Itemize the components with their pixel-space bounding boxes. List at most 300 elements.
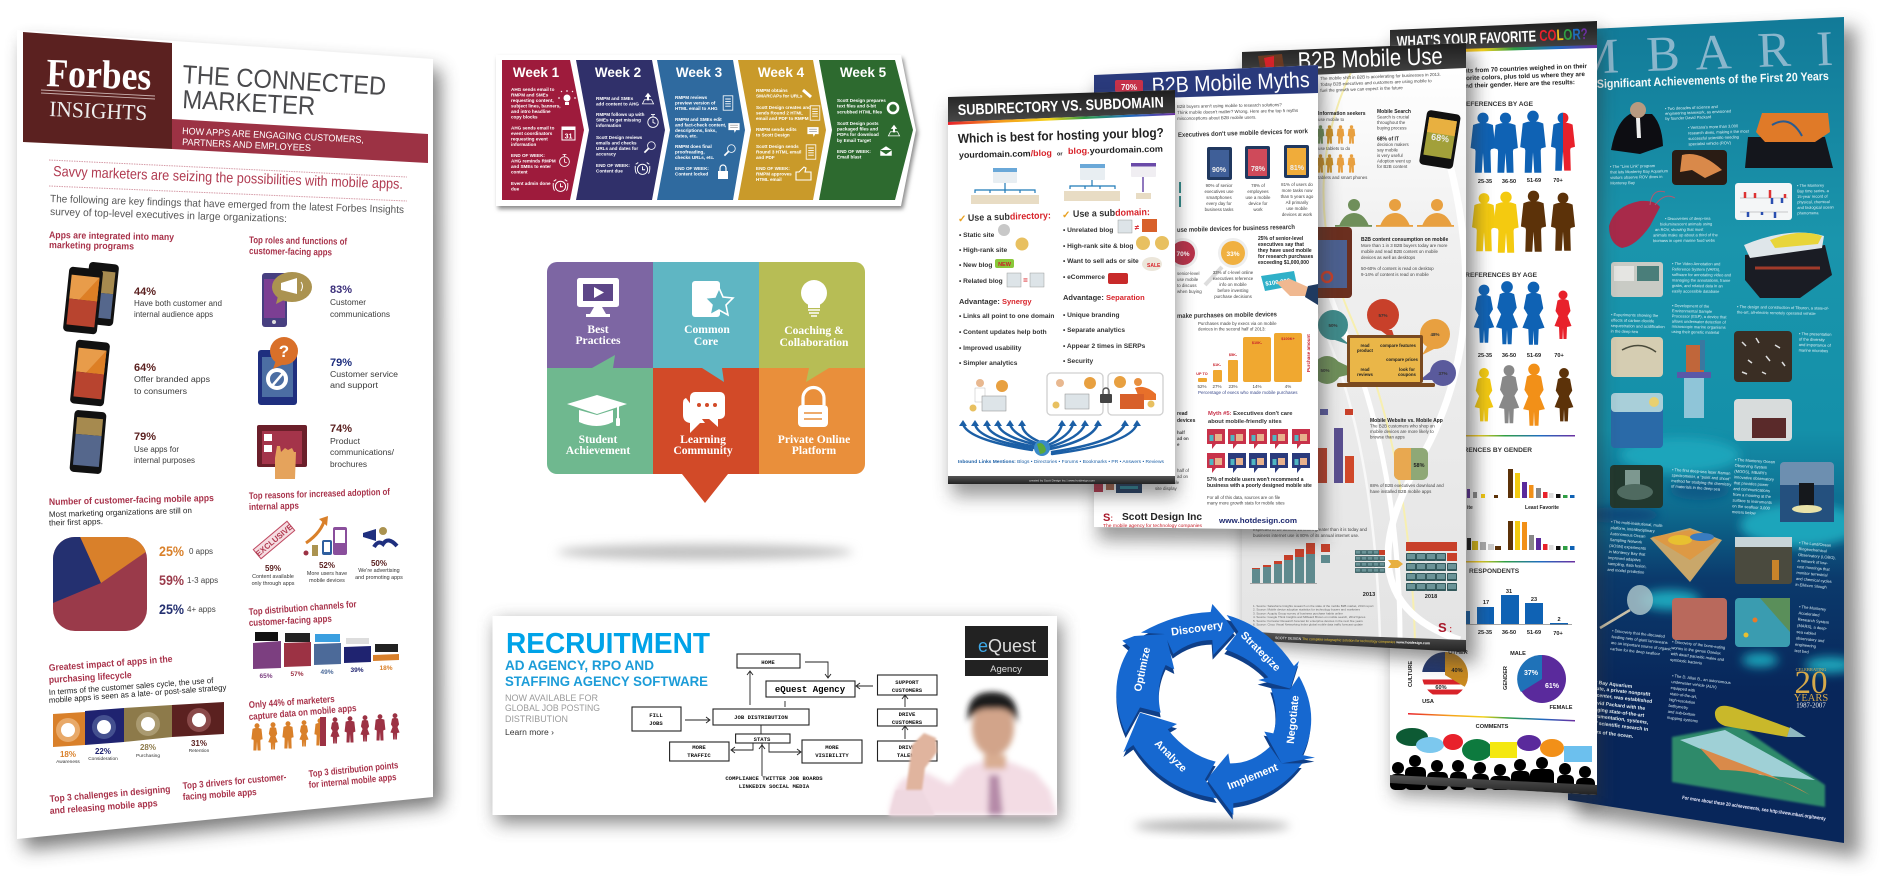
- chart: gender pie: 37%: [1524, 670, 1539, 677]
- captions: percent tablets: 90% of senior: [1206, 183, 1232, 188]
- footer url text: For more about these 20 achievements, see http://www.mbari.org/twenty: [1682, 795, 1826, 822]
- subdomain column: • Unrelated blog: [1063, 227, 1113, 234]
- founding text block: Monterey Bay Aquarium: [1575, 678, 1633, 690]
- text: read on devices: read: [1177, 411, 1188, 417]
- text: mobile search: decision makers: [1377, 142, 1410, 147]
- female silhouettes by age: FEMALE PREFERENCES BY AGE: [1432, 272, 1538, 279]
- captions: achievement notes: spectrometer, a "point and shoot": [1672, 472, 1731, 481]
- cell: best practices: Practices: [575, 334, 621, 347]
- captions: achievement notes: in the deep sea: [1611, 328, 1639, 334]
- chevron: week 1: requesting event: [511, 136, 548, 142]
- icon: megaphone and person: [363, 527, 397, 547]
- chart: purchasing lifecycle: 22%: [95, 747, 111, 756]
- text: mobile search: Mobile Search: [1377, 109, 1411, 115]
- stats: customer roles: [330, 284, 399, 469]
- chart: distribution channels: 18%: [379, 665, 393, 672]
- subdirectory column: • Links all point to one domain: [959, 313, 1054, 320]
- captions: achievement notes: grabs, and related data in an: [1672, 283, 1723, 288]
- text: mobile search: throughout the: [1377, 120, 1406, 125]
- footer band: SCOTT DESIGN The complete infographic solution for technology companies www.hotdesign.com: [1275, 636, 1430, 645]
- text: small footnote: For all of this data, sources are on file: [1207, 495, 1280, 500]
- heading: apps integrated: [49, 230, 175, 252]
- chart: monitor grids: 2013: [1363, 592, 1375, 598]
- captions: achievement notes: 15-year record of: [1797, 194, 1829, 199]
- chart: coin stacks: UP TO: [1196, 372, 1208, 376]
- url comparison: yourdomain.com /blog: [959, 148, 1052, 160]
- chart: coin stacks: 27%: [1212, 384, 1222, 389]
- stats: customer and internal apps: 44%: [134, 286, 156, 298]
- chart: respondents by age: 51-69: [1527, 630, 1541, 636]
- captions: percent tablets: executives use: [1204, 189, 1234, 194]
- photo: time series chart: [1735, 183, 1792, 220]
- poster title: MBARI: [1573, 20, 1834, 85]
- chevron: week 3: preview version of: [675, 100, 716, 106]
- male silhouettes by age: 70+: [1553, 178, 1563, 184]
- hand drawn flow diagram: DRIVE: [899, 744, 916, 751]
- cell: private online platform: Platform: [792, 444, 837, 457]
- cell: best practices: Best: [587, 323, 609, 336]
- pictogram: information seekers: Information seekers: [1318, 111, 1366, 117]
- text: mobile search: Search is crucial: [1377, 114, 1409, 120]
- chart: gender pie: [1503, 651, 1573, 711]
- cell: common core: Common: [684, 323, 730, 336]
- chevron: week 3: dates, etc.: [675, 134, 697, 138]
- chart: distribution channels: 39%: [350, 667, 364, 674]
- chevron: week 1: content: [511, 170, 528, 174]
- chevron: week 1: and intro headline: [511, 109, 551, 114]
- icons: research circles: 33%: [1226, 251, 1240, 258]
- captions: achievement notes: on the seafloor 3,000: [1732, 503, 1771, 511]
- photo: tiburon ROV: [1744, 233, 1832, 298]
- captions: achievement notes: in Elkhorn Slough: [1795, 582, 1827, 590]
- chart: gender pie: 61%: [1545, 683, 1560, 690]
- photo: 3D seafloor map: [1650, 528, 1722, 582]
- panel: B2B mobile myths poster: info on mobile: [1219, 282, 1247, 287]
- cell: private online platform: [778, 388, 850, 457]
- eQuest logo: Agency: [990, 664, 1022, 675]
- captions: achievement notes: • The Monterey: [1799, 604, 1826, 612]
- subdirectory column: • Related blog: [959, 278, 1003, 285]
- captions: achievement notes: carbon for the deep seafloor: [1610, 646, 1661, 656]
- stats: adoption reasons: mobile devices: [309, 578, 345, 584]
- panel: B2B mobile myths poster: 33% of c-level online: [1213, 270, 1254, 275]
- text: mobile website vs app: mobile devices are more likely to: [1370, 429, 1434, 434]
- text: research stats: senior-level: [1177, 271, 1199, 276]
- cell: student achievement: Student: [579, 433, 617, 446]
- subdomain column: [1062, 207, 1169, 365]
- captions: achievement notes: and importance of: [1799, 342, 1832, 348]
- female silhouettes by age: 70+: [1554, 353, 1564, 359]
- heading: top reasons: [249, 487, 391, 513]
- captions: achievement notes: surface to instruments: [1732, 498, 1772, 505]
- subdirectory column: • High-rank site: [959, 247, 1007, 254]
- chart: culture pie with flag: [1408, 650, 1470, 705]
- stats: customer roles: 74%: [330, 423, 352, 435]
- heading: number of apps: their first apps.: [49, 517, 103, 527]
- hand drawn flow diagram: TRAFFIC: [687, 752, 711, 759]
- legend: pie: 59%: [159, 572, 184, 588]
- heading: greatest impact: In terms of the customer sales cycle, the use of: [48, 676, 214, 697]
- captions: percent tablets: 78% of: [1251, 183, 1265, 188]
- link mentions line: Inbound Links Mentions: Blogs • Directories • Forums • Bookmarks • PR • Answers • Reviews: [958, 459, 1165, 465]
- captions: achievement notes: the-art, all-electric remotely operated vehicle: [1737, 309, 1816, 316]
- photo: microbes: [1734, 331, 1792, 382]
- legend: pie: 1-3 apps: [187, 576, 218, 585]
- subtitle band: PARTNERS AND EMPLOYEES: [182, 137, 311, 154]
- photo: reef fish: [1735, 598, 1790, 647]
- icon: blue tablet with gear and question: ?: [279, 342, 289, 361]
- stats: customer roles: Product: [330, 437, 361, 446]
- photo: plankton sea: [1611, 393, 1663, 448]
- female silhouettes by age: [1432, 272, 1573, 426]
- chart: distribution channels: 57%: [290, 671, 304, 678]
- chart: laptop with bubbles: [1313, 299, 1456, 387]
- stats: adoption reasons: 59%: [265, 564, 281, 573]
- icons: percent tablets: 78%: [1251, 166, 1266, 173]
- poster title: MBARI: A: [1694, 23, 1733, 80]
- subdomain column: • Want to sell ads or site: [1063, 258, 1139, 265]
- chevron: week 1: Event admin done: [511, 181, 551, 186]
- subdirectory column: [958, 210, 1054, 367]
- chevron: week 4: email and PDF to RMPM: [756, 116, 809, 121]
- founding text block: instrumentation, systems,: [1586, 712, 1649, 726]
- hand drawn flow diagram: HOME: [761, 659, 775, 666]
- photo: sample processor tower: [1677, 340, 1711, 418]
- captions: achievement notes: • Experiments showing the: [1611, 312, 1659, 318]
- text: B2B content consumption: 50-60% of content is read on desktop: [1361, 266, 1434, 271]
- founding text block: waters of the ocean.: [1584, 728, 1634, 740]
- intro text: B2B buyers aren't using mobile to research solutions?: [1177, 102, 1282, 109]
- chevron: week 2: Scott Design reviews: [596, 135, 642, 140]
- photo: octopus: [1672, 150, 1727, 185]
- heading: greatest impact: mobile apps is seen as a late- or post-sale strategy: [48, 683, 227, 705]
- heading: greatest impact: purchasing lifecycle: [49, 670, 132, 686]
- chart: culture pie with flag: 40%: [1451, 668, 1463, 674]
- footnotes: 6. Source: Cisco Visual Networking Index global mobile data traffic forecast update: [1253, 622, 1363, 626]
- panel: MBARI 20 years poster: [1560, 17, 1860, 858]
- panel: Forbes Insights connected marketer poster: [17, 30, 442, 850]
- text: 57 percent: business with a poorly designed mobile site: [1207, 483, 1312, 489]
- chevron: week 2: RMPM follows up with: [596, 112, 644, 117]
- chart: respondents by age: 70+: [1553, 631, 1563, 637]
- text: read on devices: half: [1177, 430, 1185, 435]
- text: B2B content consumption: 9-14% of content is read on mobile: [1361, 272, 1429, 277]
- arrow: implement: Implement: [1226, 761, 1280, 793]
- captions: achievement notes: research dives, making it the most: [1688, 128, 1750, 135]
- icon: purple phone with megaphone bubble: [262, 272, 312, 327]
- chevron: week 4: HTML email: [756, 177, 782, 182]
- male silhouettes by age: MALE PREFERENCES BY AGE: [1436, 101, 1534, 108]
- arrow: optimize: Optimize: [1132, 646, 1153, 693]
- chevron: week 3: RMPM reviews: [675, 95, 707, 100]
- captions: achievement notes: successful scientific-needing: [1688, 134, 1739, 141]
- text: growth statement: business internet use is 80% of its annual internet use.: [1253, 533, 1359, 538]
- stats: customer and internal apps: Offer branded apps: [134, 375, 210, 384]
- chevron: week 4: Scott Design sends: [756, 144, 799, 149]
- title: The Connected Marketer: MARKETER: [182, 84, 316, 121]
- captions: achievement notes: and communications: [1733, 486, 1770, 493]
- intro text: Today B2B executives and customers are using mobile to: [1320, 78, 1432, 87]
- hand drawn flow diagram: CUSTOMERS: [892, 719, 923, 726]
- male silhouettes by age: 51-69: [1527, 178, 1541, 184]
- text: mobile search: is very useful: [1377, 153, 1403, 158]
- text: hidden column: ad on: [1177, 474, 1189, 479]
- text: 57 percent: 57% of mobile users won't recommend a: [1207, 477, 1304, 483]
- intro paragraph: The following are key findings that have emerged from the latest Forbes Insights: [50, 193, 404, 216]
- text: read on devices: e: [1177, 442, 1180, 447]
- captions: achievement notes: of the diversity: [1799, 336, 1825, 342]
- eQuest logo: eQuest: [978, 636, 1036, 656]
- chart: gender pie: MALE: [1510, 651, 1526, 657]
- stats: customer roles: brochures: [330, 460, 367, 469]
- subdomain column: Use a subdomain:: [1073, 207, 1150, 220]
- photo: founder portrait: [1611, 102, 1663, 154]
- hand drawn flow diagram: COMPLIANCE TWITTER JOB BOARDS: [725, 775, 823, 782]
- footnotes: 2. Source: Mobile device adoption statistics for technology buyers and marketers: [1253, 608, 1361, 612]
- photo: AUV over seafloor: [1672, 706, 1825, 807]
- panel: B2B mobile myths poster: executives say that: [1258, 242, 1304, 248]
- captions: achievement notes: • Discovery that the discarded: [1612, 628, 1665, 639]
- chevron: week 1: 31: [565, 134, 572, 140]
- icon: hand with money: $100,000: [1265, 278, 1291, 288]
- captions: achievement notes: Autonomous Ocean: [1610, 531, 1646, 539]
- chevron: week 5: [819, 60, 913, 200]
- footer headings: top 3 lists: for internal mobile apps: [308, 772, 397, 791]
- chart: laptop with bubbles: product: [1357, 348, 1374, 353]
- chart: gender pie: FEMALE: [1550, 705, 1573, 711]
- legend: pie: 25%: [159, 543, 184, 559]
- female silhouettes by age: 51-69: [1527, 353, 1541, 359]
- chart: 58 percent rounded pie: 58%: [1413, 463, 1425, 469]
- chevron: week 3: checks URLs, etc.: [675, 155, 714, 160]
- captions: achievement notes: equipped with: [1670, 685, 1696, 693]
- founding text block: Research Institute, a private nonprofit: [1560, 682, 1651, 698]
- chevron: week 5: Email blast: [837, 154, 862, 160]
- photo: rescue crew: [1734, 399, 1792, 441]
- text: research stats: when buying: [1177, 289, 1202, 294]
- heading: top roles: [249, 235, 348, 258]
- hand drawn flow diagram: [632, 654, 937, 790]
- captions: achievement notes: specialist vehicle (ROV): [1688, 140, 1732, 146]
- text: B2B content consumption: mobile and read B2B content on mobile: [1361, 249, 1438, 254]
- title: The Connected Marketer: [182, 59, 387, 121]
- logo: Scott Design Inc: The mobile agency for technology companies: [1103, 523, 1203, 528]
- chevron: week 4: Week 4: [758, 65, 805, 80]
- text: research stats: use mobile: [1177, 277, 1199, 282]
- chart: coin stacks: Purchase amount: [1306, 334, 1311, 372]
- pictogram: marketers capturing data: [251, 713, 400, 750]
- chevron: week 2: [576, 60, 665, 200]
- icon: product tablet with hand: [257, 425, 307, 479]
- captions: achievement notes: and sub-bottom: [1667, 709, 1696, 717]
- captions: achievement notes: engineering teamwork, as envisioned: [1665, 108, 1731, 116]
- captions: achievement notes: • The design and construction of Tiburon, a state-of-: [1737, 304, 1830, 311]
- chart: respondents by age: 23: [1531, 597, 1537, 603]
- captions: percent tablets: 81% of users do: [1281, 182, 1313, 187]
- panel: six feature speech bubble grid: [547, 262, 865, 560]
- hand drawn flow diagram: MORE: [825, 744, 839, 751]
- legend: pie: 0 apps: [189, 547, 213, 556]
- captions: achievement notes: Sampling Network: [1610, 537, 1642, 544]
- cell: best practices: [575, 278, 621, 347]
- icons: research circles: 70%: [1176, 251, 1190, 258]
- logo: Scott Design Inc: Scott Design Inc: [1122, 511, 1202, 523]
- panel: B2B mobile myths poster: for research purchases: [1258, 254, 1314, 260]
- chevron: week 1: subject lines, banners,: [511, 104, 561, 108]
- poster title: MBARI: B: [1645, 25, 1681, 82]
- captions: achievement notes: microscopic marine organisms: [1672, 324, 1726, 330]
- chart: respondents by age: 17: [1483, 600, 1489, 606]
- question heading: Which is best for hosting your blog?: [958, 125, 1164, 146]
- captions: achievement notes: easily accessible database: [1672, 288, 1720, 294]
- chevron: week 1: RMPM and SMEs: [511, 92, 549, 98]
- icon: exclusive stamp: EXCLUSIVE: [254, 522, 295, 558]
- chart: preferences by gender: Least Favorite: [1525, 505, 1559, 511]
- intro text: The mobile shift in B2B is accelerating for businesses in 2013.: [1320, 72, 1441, 81]
- chevron: week 2: emails and checks: [596, 140, 637, 146]
- captions: percent tablets: use mobile: [1286, 206, 1308, 211]
- captions: achievement notes: platform, interdisciplinary: [1610, 525, 1655, 533]
- captions: achievement notes: state-of-the-art,: [1670, 691, 1697, 699]
- poster title: MBARI: I: [1815, 20, 1834, 76]
- header band: [948, 90, 1175, 125]
- arrow: negotiate: [1264, 676, 1315, 767]
- icon: brown tablet: [1310, 227, 1352, 298]
- chevron: week 4: RMPM sends edits: [756, 127, 797, 132]
- arrow: optimize: [1116, 634, 1174, 738]
- photo: blurred man drawing: [889, 692, 1057, 815]
- photo: red jelly: [1609, 191, 1675, 248]
- chart: coin stacks: $1K-: [1213, 363, 1222, 367]
- stats: adoption reasons: 52%: [319, 561, 335, 570]
- stats: customer roles: communications: [330, 310, 390, 319]
- url comparison: or: [1057, 152, 1063, 158]
- chart: coin stacks: 4%: [1285, 384, 1291, 389]
- panel: B2B mobile use poster: [1242, 43, 1476, 664]
- chevron: week 2: END OF WEEK:: [596, 163, 630, 168]
- chart: purchasing lifecycle: Purchasing: [136, 753, 160, 759]
- header band: WHAT'S YOUR FAVORITE COLOR?: [1396, 26, 1588, 51]
- stats: adoption reasons: only through apps: [252, 581, 295, 587]
- chevron: week 3: proofreading,: [675, 150, 705, 154]
- chevron: week 1: AHG sends email to: [511, 126, 554, 130]
- cell: common core: [684, 281, 733, 348]
- chart: respondents by age: [1466, 568, 1572, 637]
- chart: respondents by age: 36-50: [1502, 630, 1516, 636]
- captions: achievement notes: a network of low-: [1797, 558, 1829, 566]
- captions: achievement notes: symbiotic bacteria: [1670, 657, 1703, 666]
- captions: percent tablets: use a mobile: [1246, 195, 1271, 200]
- diagram: subdirectory site tree: [971, 168, 1039, 204]
- chart: culture pie with flag: 60%: [1435, 685, 1447, 691]
- text: 88 percent: have installed B2B mobile apps: [1370, 489, 1432, 494]
- intro text: favorite colors, plus told us where they are: [1457, 71, 1586, 82]
- text: growth statement: expected to be almost 18 times greater than it is today and: [1253, 527, 1367, 532]
- heading: only 44%: Only 44% of marketers: [248, 694, 335, 711]
- footer headings: top 3 lists: Top 3 distribution points: [308, 760, 399, 780]
- captions: achievement notes: mapping systems: [1667, 715, 1698, 723]
- contact url: www.hotdesign.com: [1218, 516, 1297, 525]
- hand drawn flow diagram: FILL: [649, 712, 663, 719]
- female silhouettes by age: 36-50: [1502, 353, 1516, 359]
- subdomain column: SALE: [1147, 263, 1161, 269]
- chart: laptop with bubbles: compare features: [1380, 343, 1417, 348]
- stats: customer and internal apps: internal purposes: [134, 456, 195, 465]
- cell: coaching and collaboration: Coaching &: [784, 324, 844, 337]
- footer band: [1390, 775, 1597, 795]
- cell: student achievement: [566, 395, 630, 457]
- chart: laptop with bubbles: 50%: [1320, 368, 1330, 373]
- subdirectory column: Use a subdirectory:: [968, 210, 1051, 224]
- captions: achievement notes: underwater vehicle (AUV): [1671, 679, 1718, 690]
- captions: percent tablets: smartphones: [1206, 195, 1232, 200]
- hand drawn flow diagram: eQuest Agency: [775, 685, 846, 695]
- icon: phone pair: [63, 262, 119, 335]
- chevron: week 4: [738, 60, 826, 200]
- panel: subdirectory vs subdomain poster: [948, 90, 1177, 496]
- chevron: week 1: END OF WEEK:: [511, 153, 545, 158]
- chevron: week 2: information: [596, 123, 621, 128]
- captions: percent tablets: every day for: [1206, 201, 1232, 206]
- captions: achievement notes: an ROV, showing that most: [1655, 227, 1704, 232]
- stats: adoption reasons: Content available: [252, 574, 294, 580]
- photos: achievements: [1600, 102, 1834, 807]
- chevron: week 5: END OF WEEK:: [837, 149, 871, 154]
- stats: customer roles: Customer service: [330, 370, 399, 379]
- text: mobile search: 68% of IT: [1377, 136, 1399, 142]
- chart: monitor grids: [1355, 542, 1457, 600]
- stats: adoption reasons: [252, 559, 403, 587]
- chevron: week 1: copy blocks: [511, 114, 538, 120]
- chevron: week 2: SMEs to get missing: [596, 118, 641, 122]
- chevron: week 3: Week 3: [676, 65, 723, 80]
- pictogram: thumbs grid: [1207, 429, 1310, 473]
- captions: achievement notes: by founder David Packard: [1665, 114, 1711, 121]
- captions: achievement notes: • The presentation: [1799, 331, 1832, 337]
- text: mobile website vs app: The B2B customers who shop on: [1370, 424, 1435, 428]
- footer band: [1242, 632, 1466, 652]
- female silhouettes by age: 25-35: [1478, 353, 1492, 359]
- header band: B2B Mobile Use: [1297, 43, 1443, 75]
- background sea patches: [1580, 437, 1860, 673]
- stats: customer and internal apps: Use apps for: [134, 445, 179, 454]
- chevron: week 1: Week 1: [513, 65, 560, 80]
- chevron: week 4: to Scott Design: [756, 132, 790, 138]
- heading: top roles: customer-facing apps: [249, 246, 332, 258]
- captions: achievement notes: meters below: [1732, 509, 1756, 516]
- chevron: week 1: information: [511, 142, 536, 147]
- legend: pie: 25%: [159, 601, 184, 617]
- chart: purchasing lifecycle: Awareness: [56, 759, 80, 765]
- captions: achievement notes: bathymetry: [1668, 703, 1688, 710]
- captions: achievement notes: that lets Monterey Bay Aquarium: [1610, 168, 1669, 174]
- captions: achievement notes: of materials in the deep sea: [1671, 483, 1721, 492]
- chart: laptop with bubbles: read: [1360, 343, 1370, 348]
- footer headings: top 3 lists: facing mobile apps: [182, 787, 257, 803]
- captions: achievement notes: test bed: [1794, 648, 1809, 654]
- background curves: [1322, 73, 1466, 640]
- panel: B2B mobile myths poster: [1094, 65, 1323, 542]
- chevron: week 2: Content due: [596, 168, 623, 174]
- captions: achievement notes: and model prediction: [1607, 567, 1645, 575]
- subdomain column: • Security: [1063, 358, 1093, 365]
- comments section with speech bubbles and audience: COMMENTS: [1476, 724, 1509, 730]
- banner subtext: DISTRIBUTION: [505, 714, 568, 724]
- subdomain column: • Separate analytics: [1063, 327, 1125, 334]
- badge: celebrating 20 years: 20: [1794, 665, 1828, 701]
- founding text block: methods of scientific research in: [1570, 718, 1648, 733]
- captions: achievement notes: method for studying the chemistry: [1671, 478, 1731, 487]
